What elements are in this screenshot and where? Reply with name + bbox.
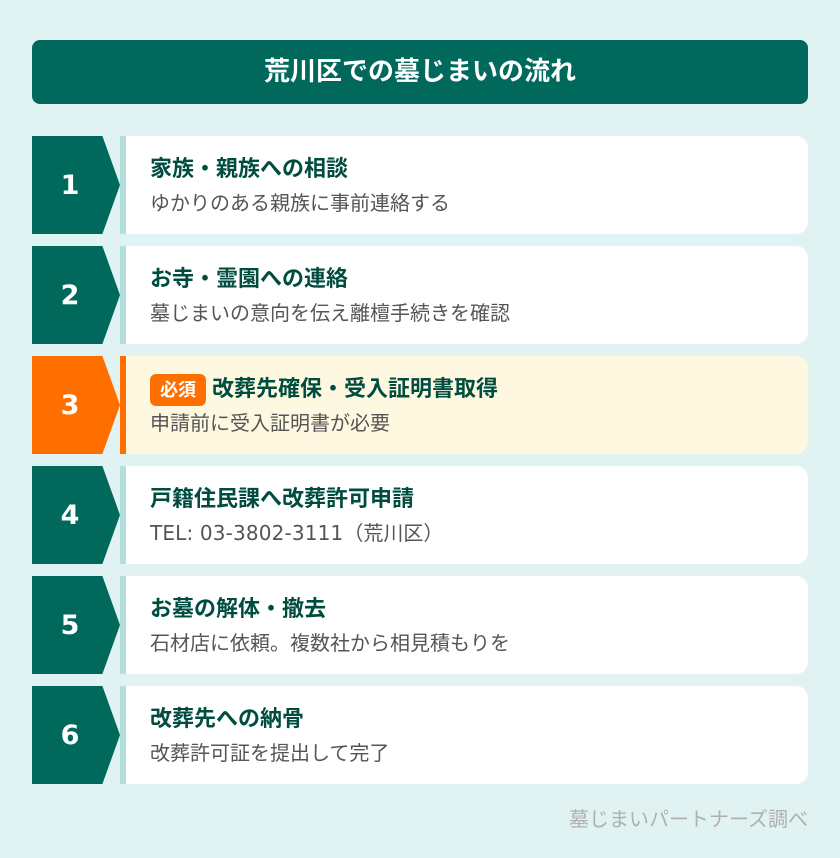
step 3 number (32, 356, 120, 454)
step 6 (32, 686, 808, 784)
step 3 (required, highlighted) (32, 356, 808, 454)
step 1 number (32, 136, 120, 234)
title: 荒川区での墓じまいの流れ (264, 51, 576, 88)
step 1 (32, 136, 808, 234)
step 6 heading: 改葬先への納骨 (150, 701, 304, 733)
step 2 (32, 246, 808, 344)
step 4 description: TEL: 03-3802-3111（荒川区） (150, 517, 443, 546)
step 2 description: 墓じまいの意向を伝え離檀手続きを確認 (150, 297, 510, 326)
step 4 (32, 466, 808, 564)
step 4 card (120, 466, 808, 564)
step 1 card (120, 136, 808, 234)
step 3 description: 申請前に受入証明書が必要 (150, 407, 390, 436)
step 4 number: 4 (61, 500, 79, 531)
step 1 heading: 家族・親族への相談 (150, 151, 348, 183)
step 4 number (32, 466, 120, 564)
step 5 number (32, 576, 120, 674)
step 1 number: 1 (61, 170, 79, 201)
step 3 card (120, 356, 808, 454)
source credit: 墓じまいパートナーズ調べ (569, 803, 808, 832)
step 3 heading with badge: 改葬先確保・受入証明書取得 (212, 371, 498, 403)
step 2 heading: お寺・霊園への連絡 (150, 261, 348, 293)
step 6 description: 改葬許可証を提出して完了 (150, 737, 389, 766)
step 1 description: ゆかりのある親族に事前連絡する (150, 187, 450, 216)
step 3 number: 3 (61, 390, 79, 421)
step 5 card (120, 576, 808, 674)
title (32, 40, 808, 104)
step 5 (32, 576, 808, 674)
step 5 number: 5 (61, 610, 79, 641)
step 4 heading: 戸籍住民課へ改葬許可申請 (150, 481, 414, 513)
step 2 number: 2 (61, 280, 79, 311)
step 5 heading: お墓の解体・撤去 (150, 591, 326, 623)
step 6 number (32, 686, 120, 784)
step 6 number: 6 (61, 720, 79, 751)
step 2 card (120, 246, 808, 344)
step 2 number (32, 246, 120, 344)
step 5 description: 石材店に依頼。複数社から相見積もりを (150, 627, 510, 656)
step 6 card (120, 686, 808, 784)
step 3 heading with badge: 必須 (160, 376, 196, 402)
